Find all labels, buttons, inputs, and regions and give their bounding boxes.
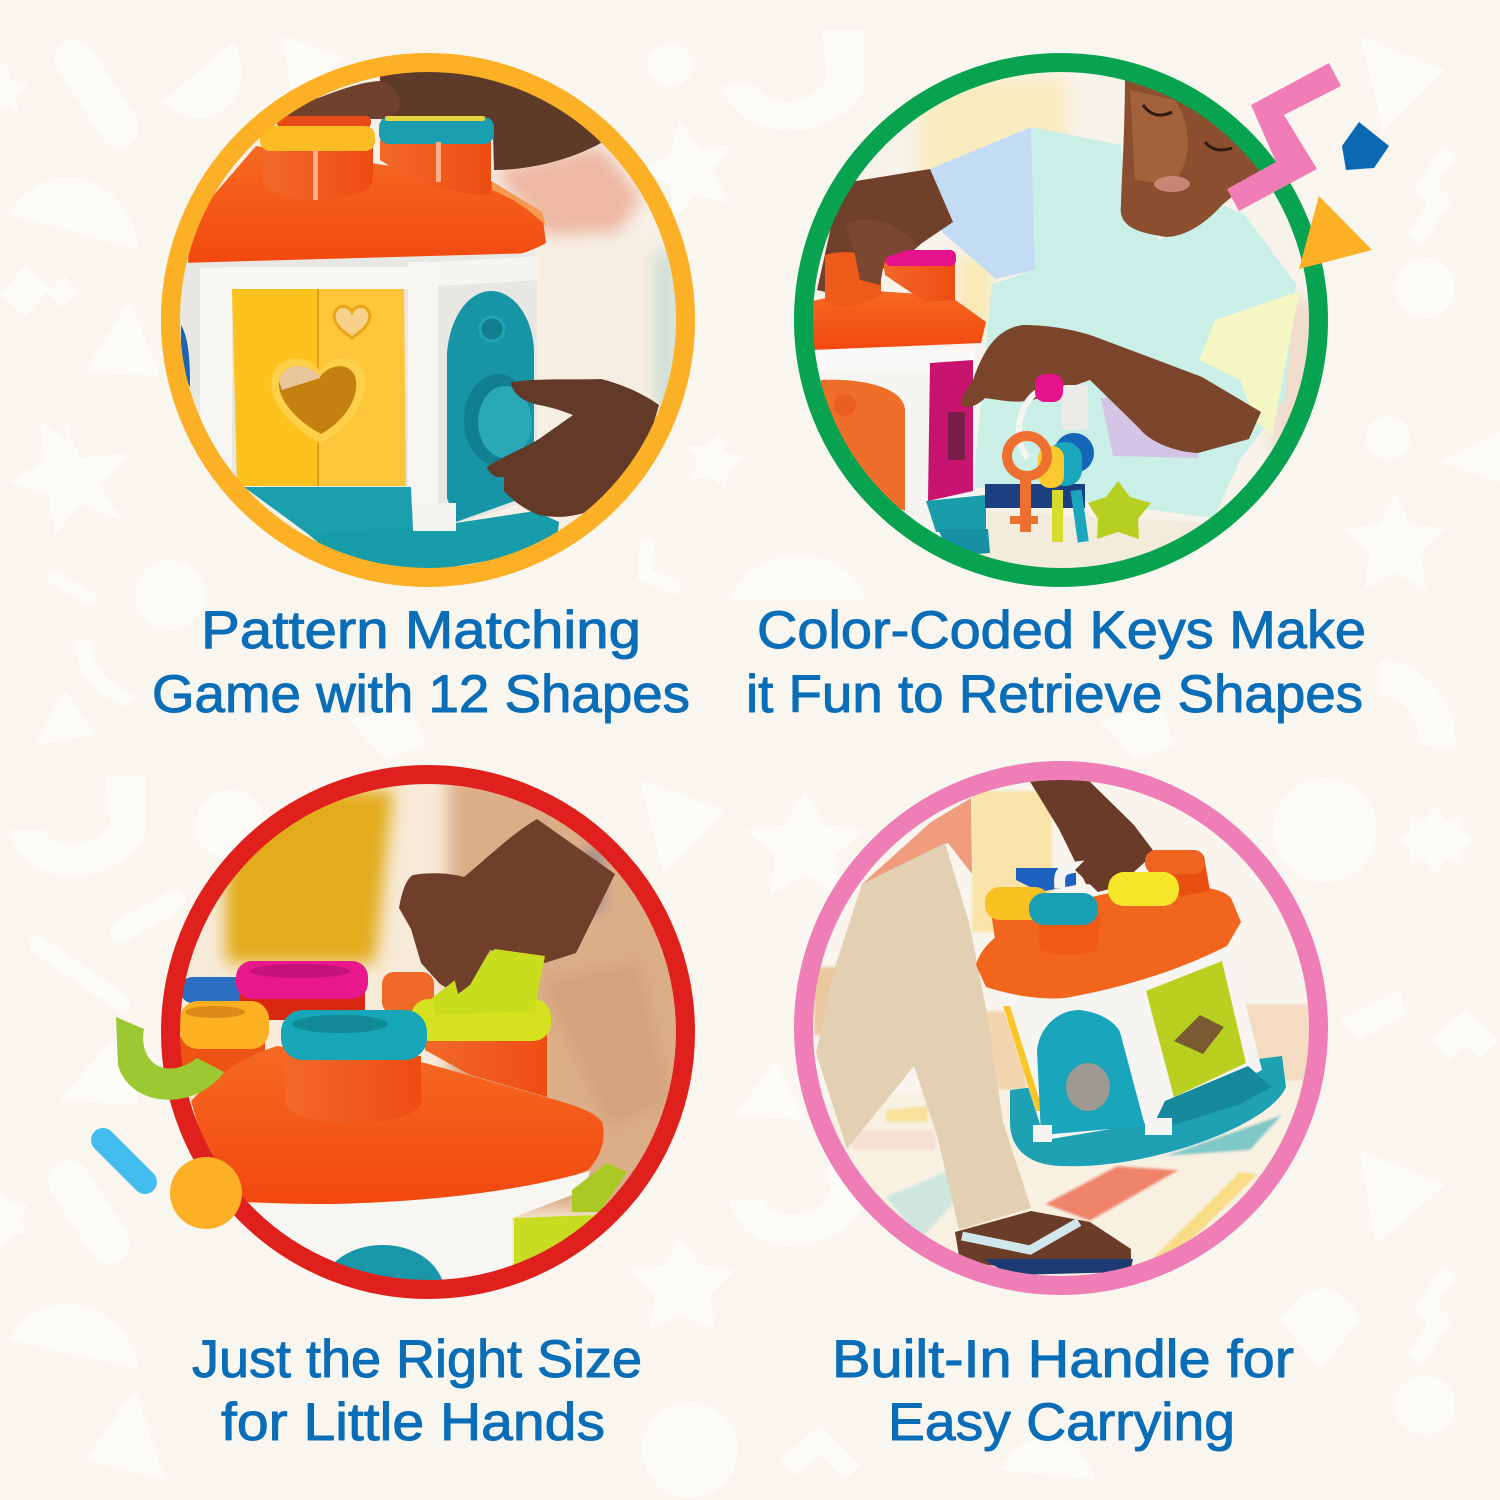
icon: green arc xyxy=(116,1017,224,1100)
diamond hole xyxy=(1174,1015,1224,1054)
yellow door xyxy=(232,289,406,486)
ring: orange xyxy=(170,62,686,578)
toy walls xyxy=(180,253,537,530)
icon: yellow dot xyxy=(170,1157,242,1229)
toy roof xyxy=(188,146,546,267)
fingers over shape xyxy=(454,950,490,994)
hand on knob xyxy=(487,379,659,517)
right arm and hand xyxy=(961,325,1261,453)
lime door xyxy=(1146,961,1246,1097)
teal knob xyxy=(285,1056,421,1124)
lime shape xyxy=(432,949,545,1015)
caption: Just the Right Size xyxy=(192,1330,642,1389)
hand xyxy=(399,819,615,998)
lime knob xyxy=(425,1035,547,1097)
photo: toddler carrying the toy house by its handle xyxy=(813,780,1309,1276)
toy roof xyxy=(976,886,1241,998)
icon: lime star shape xyxy=(1088,481,1151,539)
caption xyxy=(192,1330,642,1452)
panel: built-in handle xyxy=(790,765,1330,1452)
toy walls xyxy=(1004,1002,1262,1139)
teal door xyxy=(1037,1010,1145,1135)
caption xyxy=(152,601,690,724)
icon: blue pentagon xyxy=(1342,122,1389,170)
icon: heart shaped hole xyxy=(271,359,365,444)
caption xyxy=(746,601,1366,724)
white walls xyxy=(250,1171,590,1280)
ring: pink xyxy=(804,770,1318,1286)
toy base xyxy=(244,487,413,534)
shirt xyxy=(862,798,972,884)
arm xyxy=(1030,780,1153,884)
caption: for Little Hands xyxy=(221,1393,605,1452)
roof xyxy=(191,1046,604,1204)
toy walls xyxy=(814,345,977,488)
ring: red xyxy=(170,774,686,1290)
toy base xyxy=(1010,1056,1286,1166)
photo: child's hand turning a key on the toy house xyxy=(180,72,676,568)
back knobs xyxy=(182,977,240,1003)
shirt xyxy=(973,127,1296,518)
teal door xyxy=(447,291,534,522)
icon: yellow triangle xyxy=(1299,196,1372,269)
icon: colored keys xyxy=(1007,374,1094,543)
caption xyxy=(832,1330,1294,1452)
panel: color-coded keys xyxy=(746,55,1389,724)
panel: pattern matching xyxy=(152,55,700,724)
toy base xyxy=(926,495,986,532)
table xyxy=(980,511,1204,568)
photo: child's hand placing a shape in the sorter xyxy=(180,784,676,1280)
caption: Built-In Handle for xyxy=(832,1330,1294,1389)
toy roof xyxy=(813,290,986,350)
caption: Game with 12 Shapes xyxy=(152,665,690,724)
face xyxy=(1120,80,1260,237)
caption: it Fun to Retrieve Shapes xyxy=(746,665,1363,724)
photo: child using keys on the toy house xyxy=(813,72,1309,568)
caption: Easy Carrying xyxy=(888,1393,1235,1452)
panel: right size xyxy=(103,770,700,1452)
caption: Pattern Matching xyxy=(201,601,641,660)
knobs xyxy=(1145,862,1210,900)
left arm and hand xyxy=(817,169,953,300)
ring: green xyxy=(804,62,1318,578)
icon: pink zigzag xyxy=(1227,63,1341,211)
icon: blue bar xyxy=(103,1140,145,1182)
caption: Color-Coded Keys Make xyxy=(757,601,1366,660)
foot xyxy=(955,1211,1131,1266)
legs xyxy=(816,843,1031,1230)
